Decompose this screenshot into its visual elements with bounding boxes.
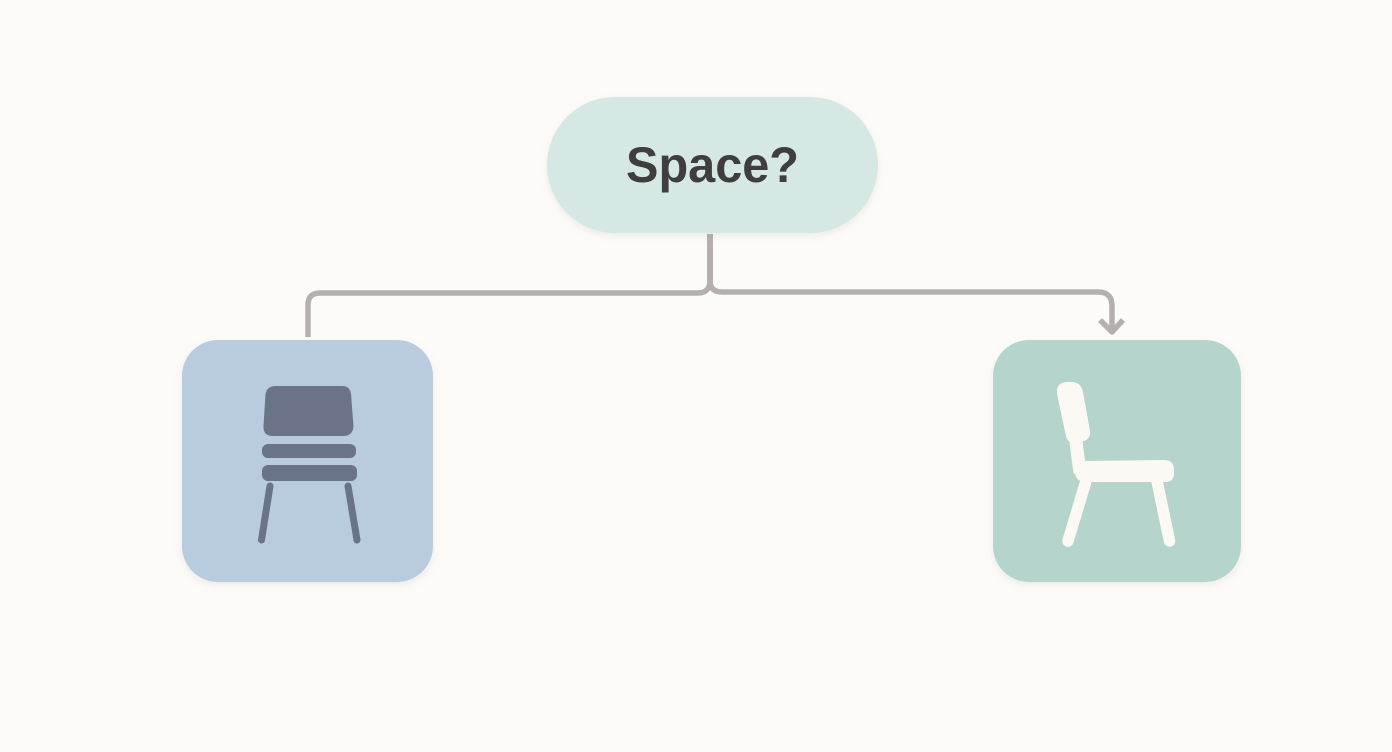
card bbox=[182, 340, 433, 582]
pill shape bbox=[547, 97, 878, 233]
chair seat bbox=[262, 465, 357, 481]
panel: left option, front-facing chair bbox=[182, 340, 433, 582]
chair front leg bbox=[1157, 481, 1170, 541]
connector: branches from question to both options bbox=[308, 234, 1123, 337]
chair backrest bbox=[1057, 382, 1090, 443]
chair rail bbox=[262, 444, 356, 458]
chair neck bbox=[1076, 438, 1080, 473]
connector: left branch bbox=[308, 282, 710, 337]
heading: Space?: Space? bbox=[626, 137, 799, 193]
icon: side-facing chair bbox=[1057, 382, 1174, 541]
chair seat bbox=[1075, 460, 1174, 482]
chair back bbox=[263, 386, 354, 436]
question pill bbox=[547, 97, 878, 233]
panel: right option, side-facing chair bbox=[993, 340, 1241, 582]
arrow: right branch bbox=[710, 282, 1112, 331]
connector: stem bbox=[707, 234, 713, 284]
arrow: head bbox=[1100, 320, 1123, 332]
card bbox=[993, 340, 1241, 582]
chair front legs bbox=[262, 486, 357, 540]
chair rear leg bbox=[1068, 481, 1086, 541]
icon: front-facing chair bbox=[262, 386, 357, 540]
